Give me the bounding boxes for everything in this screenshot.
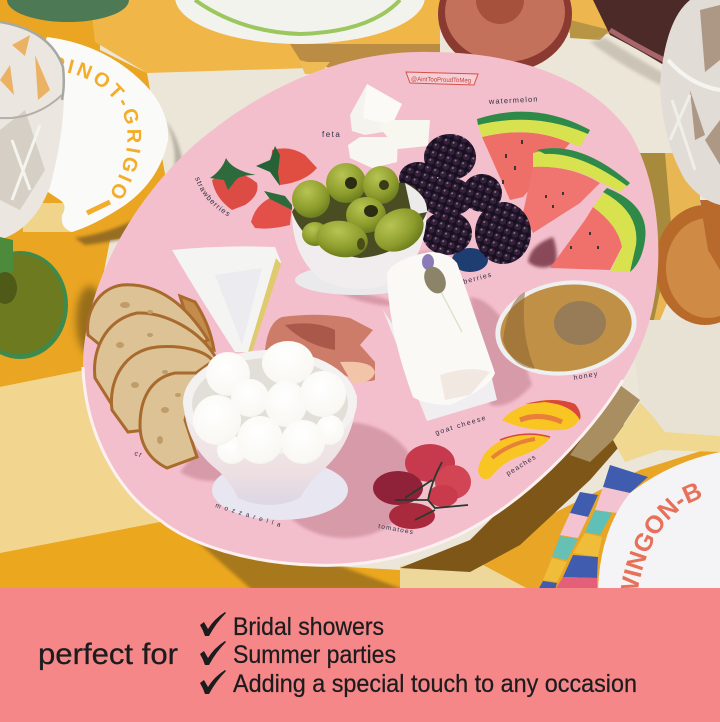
- label: honey: honey: [573, 371, 599, 382]
- sticker: brand banner: [406, 72, 478, 85]
- mozzarella bowl: [183, 341, 357, 520]
- sticker: brand banner: @AintTooProudToMeg: [411, 76, 471, 85]
- banner: [0, 588, 720, 722]
- red goblet base: [438, 0, 572, 72]
- icon: check 1: [200, 612, 226, 636]
- heading: perfect for: perfect for: [38, 638, 178, 671]
- left side plate: [46, 37, 168, 232]
- list item 1: Bridal showers: [233, 613, 384, 641]
- olives: [302, 222, 328, 246]
- illustration: feta: [348, 84, 430, 168]
- goat cheese log: [383, 252, 497, 421]
- illustration: cured meat: [265, 315, 375, 383]
- glass base top left: [7, 0, 129, 22]
- bread slices: [88, 285, 216, 468]
- basket top right: [590, 0, 690, 85]
- icon: check 2: [200, 641, 226, 665]
- lavender sprig: [420, 254, 462, 332]
- illustration: strawberries: [210, 146, 317, 229]
- top plate: [175, 0, 425, 44]
- illustration: watermelon: [477, 112, 646, 272]
- label: mozzarella: mozzarella: [214, 502, 282, 529]
- illustration: brie wedge: [172, 246, 281, 352]
- plate lettering: WINGON-B: [620, 484, 702, 588]
- napkin: [538, 465, 648, 590]
- left glass: [0, 22, 68, 359]
- label: tomatoes: tomatoes: [378, 523, 415, 536]
- icon: check 3: [200, 670, 226, 694]
- illustration: blueberries: [452, 248, 488, 272]
- label: berries: berries: [463, 271, 493, 286]
- label: peaches: peaches: [505, 454, 538, 478]
- illustration: honey: [489, 272, 643, 384]
- label: feta: feta: [322, 130, 341, 139]
- bread crumb texture: [116, 302, 181, 444]
- mozzarella balls: [193, 341, 346, 464]
- label: goat cheese: goat cheese: [435, 415, 488, 437]
- illustration: peaches: [478, 400, 581, 479]
- plate shadow areas: [180, 237, 557, 538]
- label: strawberries: strawberries: [195, 177, 230, 216]
- blackberries: [399, 134, 531, 264]
- label: crackers: cr: [133, 450, 144, 460]
- list item 2: Summer parties: [233, 641, 396, 669]
- plate lettering: PINOT-GRIGIO: [60, 57, 142, 198]
- glass stem and green base: [0, 237, 68, 359]
- list item 3: Adding a special touch to any occasion: [233, 670, 637, 698]
- right glass: [655, 0, 720, 325]
- olive bowl: [292, 163, 432, 295]
- serving platter: [82, 52, 658, 567]
- bottom right plate: [598, 452, 720, 588]
- label: watermelon: watermelon: [488, 94, 539, 106]
- illustration: tomatoes: [373, 444, 471, 529]
